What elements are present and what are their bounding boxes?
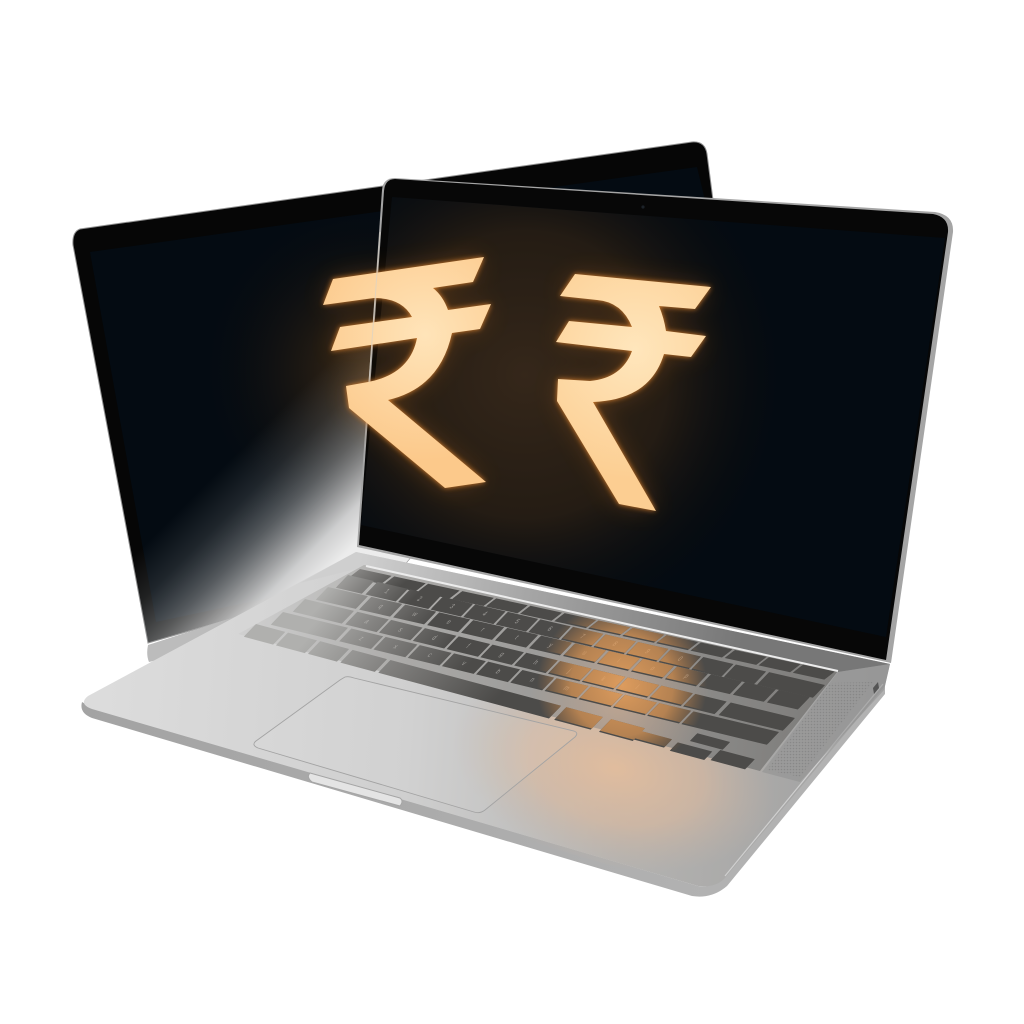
webcam [641, 205, 645, 209]
deck surface [84, 552, 890, 886]
key row: qwerty: t [513, 635, 520, 641]
key row: shift [271, 612, 779, 745]
key row: numbers: 8 [610, 641, 619, 648]
key row: home: h [531, 660, 540, 666]
key row: home: k [599, 676, 607, 683]
key row: home: d [430, 635, 438, 642]
key row: shift: c [425, 652, 434, 659]
key row: qwerty: y [546, 642, 555, 649]
key row: shift: z [357, 636, 365, 642]
key row: numbers [336, 575, 825, 698]
key row: shift: n [528, 677, 536, 684]
key row: home [293, 599, 795, 731]
base front edge [81, 682, 885, 897]
key row: home: s [396, 627, 405, 634]
key row: qwerty: u [580, 650, 589, 657]
speaker grille [767, 682, 873, 777]
lid rim [357, 178, 953, 663]
keyboard well [238, 565, 838, 771]
rear lid hinge piece [147, 612, 250, 662]
front laptop lid [357, 178, 953, 663]
orange key glow [540, 616, 704, 750]
key row: shift: v [459, 660, 468, 667]
key row: home: g [497, 651, 506, 658]
side port [873, 682, 879, 694]
key row: numbers: 3 [447, 603, 456, 610]
laptop base deck [81, 552, 890, 905]
key row: qwerty: w [409, 611, 419, 618]
trackpad [254, 677, 577, 813]
key row: numbers: 5 [513, 619, 521, 625]
key row: numbers: 7 [578, 634, 586, 640]
silver edge highlight [725, 684, 883, 876]
display [361, 197, 945, 637]
display warm glow [364, 199, 731, 572]
key row: home: a [362, 619, 371, 625]
key row: home: j [565, 668, 573, 674]
key row: qwerty [316, 587, 810, 710]
front lid edge line crossing rupee [369, 232, 380, 382]
key row: shift: x [391, 644, 400, 651]
keyboard [238, 565, 838, 790]
key row: numbers: 4 [480, 611, 489, 618]
key row: numbers: 0 [675, 656, 684, 663]
key row: numbers: 6 [545, 626, 554, 633]
key row: qwerty: r [479, 627, 487, 633]
key row: shift: b [493, 669, 502, 675]
key row: numbers: 9 [643, 649, 652, 655]
key row: qwerty: e [444, 619, 453, 626]
thumb notch [308, 773, 402, 806]
warm tint in keyboard well [552, 629, 693, 748]
darker rear deck strip [300, 552, 890, 672]
key row: qwerty: i [615, 658, 622, 664]
bezel [359, 179, 948, 660]
rear laptop lid [70, 142, 713, 662]
key row: shift: m [561, 685, 571, 692]
key row: qwerty: q [376, 603, 385, 610]
rupee symbol: left [323, 257, 491, 488]
key row: qwerty: o [648, 665, 657, 672]
key row: home: f [464, 643, 471, 650]
key row: bottom with space bar and arrows [244, 617, 763, 771]
key row: qwerty: p [682, 673, 691, 680]
key row: numbers: 1 [382, 588, 391, 595]
key row: function keys [350, 569, 835, 680]
rupee symbol: right [556, 274, 711, 511]
key row: home: l [633, 684, 640, 691]
key row: numbers: 2 [415, 596, 424, 603]
keyboard highlight line [366, 566, 838, 671]
peach screen reflection [482, 707, 750, 852]
